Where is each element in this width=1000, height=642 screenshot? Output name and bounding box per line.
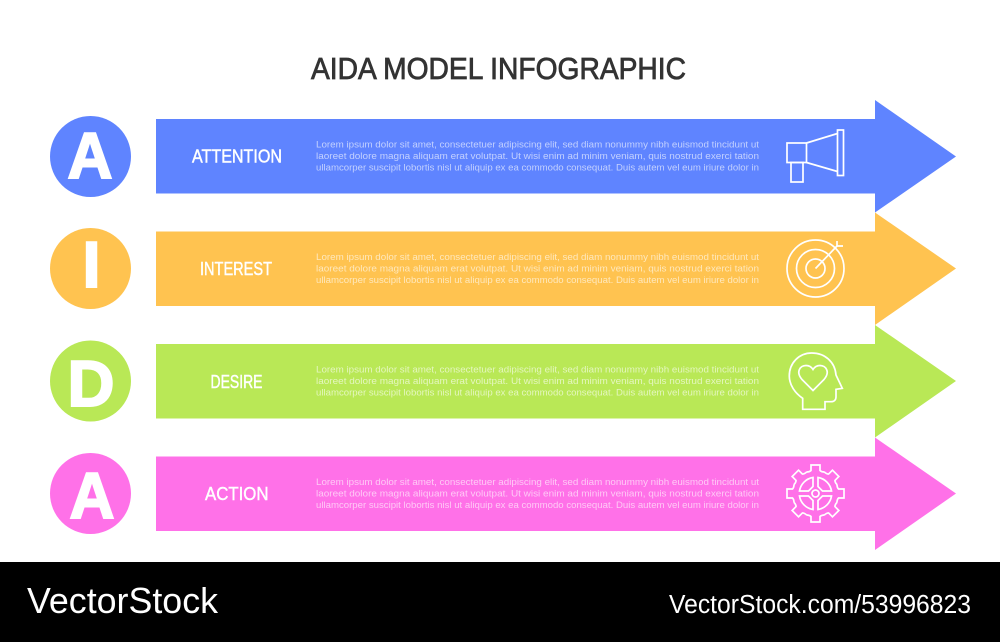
footer image id: VectorStock.com/53996823 bbox=[669, 591, 971, 619]
text block: attention: ullamcorper suscipit lobortis nisl ut aliquip ex ea commodo consequat. Duis autem vel eum iriure dolor in bbox=[316, 162, 759, 172]
heading: desire: DESIRE bbox=[210, 371, 262, 392]
text block: desire bbox=[316, 364, 760, 398]
arrow: desire bbox=[156, 325, 956, 438]
circle badge: D bbox=[50, 340, 131, 422]
text block: interest: Lorem ipsum dolor sit amet, consectetuer adipiscing elit, sed diam nonummy nibh euismod tincidunt ut bbox=[316, 252, 760, 262]
circle badge: A bbox=[50, 116, 131, 197]
panel: attention bbox=[50, 100, 956, 212]
arrow: attention bbox=[156, 100, 956, 212]
circle badge: I bbox=[50, 228, 131, 309]
arrow: interest bbox=[156, 212, 956, 325]
text block: attention: laoreet dolore magna aliquam erat volutpat. Ut wisi enim ad minim veniam, quis nostrud exerci tation bbox=[316, 151, 759, 161]
text block: interest: laoreet dolore magna aliquam erat volutpat. Ut wisi enim ad minim veniam, quis nostrud exerci tation bbox=[316, 264, 759, 274]
icon: target bbox=[787, 240, 844, 297]
text block: interest: ullamcorper suscipit lobortis nisl ut aliquip ex ea commodo consequat. Duis autem vel eum iriure dolor in bbox=[316, 275, 759, 285]
icon: head with heart bbox=[789, 353, 842, 409]
text block: desire: laoreet dolore magna aliquam erat volutpat. Ut wisi enim ad minim veniam, quis nostrud exerci tation bbox=[316, 376, 759, 386]
text block: attention bbox=[316, 140, 760, 172]
panel: desire bbox=[50, 325, 956, 438]
heading: interest: INTEREST bbox=[200, 258, 272, 279]
text block: interest bbox=[316, 252, 760, 285]
circle badge: A: A bbox=[70, 459, 114, 532]
text block: action: ullamcorper suscipit lobortis nisl ut aliquip ex ea commodo consequat. Duis autem vel eum iriure dolor in bbox=[316, 500, 759, 510]
arrow: action bbox=[156, 438, 956, 550]
circle badge: D: D bbox=[68, 347, 114, 420]
title: AIDA MODEL INFOGRAPHIC bbox=[311, 51, 686, 86]
text block: action: Lorem ipsum dolor sit amet, consectetuer adipiscing elit, sed diam nonummy nibh euismod tincidunt ut bbox=[316, 477, 760, 487]
footer logo text: VectorStock bbox=[27, 580, 219, 621]
icon: gear bbox=[787, 465, 844, 522]
circle badge: A bbox=[50, 453, 131, 534]
text block: desire: Lorem ipsum dolor sit amet, consectetuer adipiscing elit, sed diam nonummy nibh euismod tincidunt ut bbox=[316, 364, 760, 374]
icon: megaphone bbox=[787, 130, 844, 182]
text block: action bbox=[316, 477, 760, 510]
circle badge: I: I bbox=[82, 228, 101, 301]
footer bar bbox=[0, 562, 1000, 642]
heading: attention: ATTENTION bbox=[192, 146, 282, 166]
text block: desire: ullamcorper suscipit lobortis nisl ut aliquip ex ea commodo consequat. Duis autem vel eum iriure dolor in bbox=[316, 388, 759, 398]
text block: attention: Lorem ipsum dolor sit amet, consectetuer adipiscing elit, sed diam nonummy nibh euismod tincidunt ut bbox=[316, 140, 760, 150]
panel: interest bbox=[50, 212, 956, 325]
text block: action: laoreet dolore magna aliquam erat volutpat. Ut wisi enim ad minim veniam, quis nostrud exerci tation bbox=[316, 488, 759, 498]
heading: action: ACTION bbox=[205, 483, 268, 504]
circle badge: A: A bbox=[68, 119, 112, 192]
panel: action bbox=[50, 438, 956, 550]
